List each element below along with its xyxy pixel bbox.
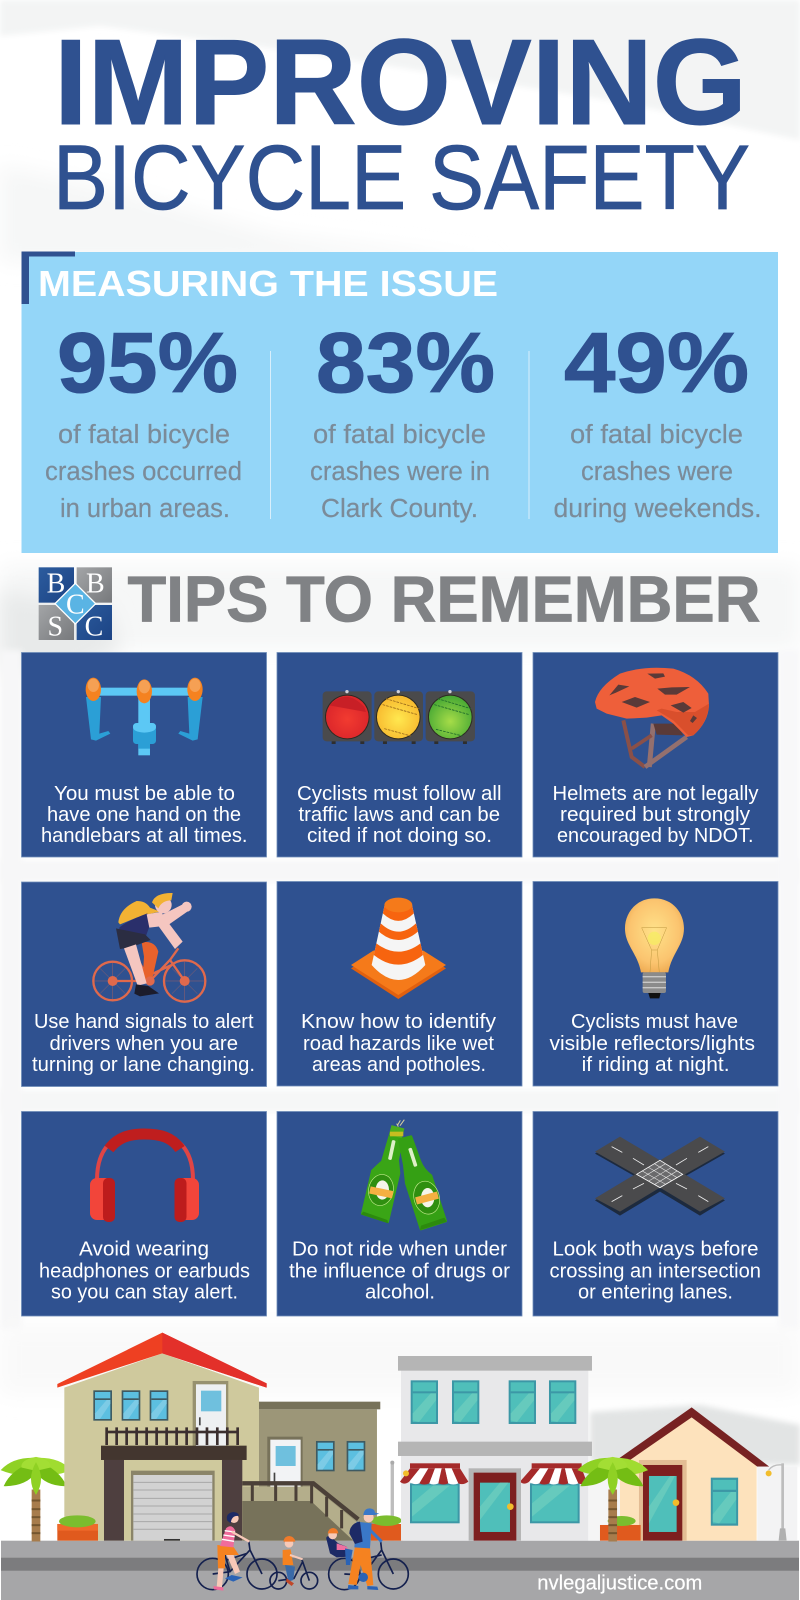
panel heading: MEASURING THE ISSUE — [38, 263, 498, 304]
tip card: intersection: crossing an intersection — [550, 1260, 761, 1282]
tip card: headphones: Avoid wearing — [79, 1238, 209, 1260]
middle lamp post and planter — [371, 1461, 403, 1541]
left house — [57, 1333, 267, 1541]
tip card: road hazards: road hazards like wet — [303, 1032, 494, 1055]
stat: 83% — [310, 316, 495, 523]
logo: BBSC: C — [85, 611, 103, 642]
icon: beer bottles — [361, 1120, 447, 1230]
tip card: traffic lights: traffic laws and can be — [298, 803, 500, 826]
tip card: intersection: Look both ways before — [552, 1238, 758, 1260]
logo: BBSC: C — [66, 589, 85, 620]
icon: headphones — [90, 1132, 199, 1222]
left awning — [400, 1463, 468, 1484]
shop windows — [410, 1483, 580, 1523]
icon: helmet — [595, 668, 709, 767]
icon: road intersection — [595, 1137, 725, 1216]
tip card: lights — [533, 882, 778, 1086]
tip card: headphones — [22, 1112, 266, 1316]
tip card: lights: visible reflectors/lights — [550, 1032, 755, 1055]
panel: measuring the issue — [22, 252, 778, 553]
tip card: road hazards — [277, 882, 522, 1086]
tip card: helmet: required but strongly — [560, 803, 751, 826]
tip card: traffic lights: Cyclists must follow all — [297, 782, 502, 805]
shop door — [469, 1468, 521, 1541]
stat: 95%: in urban areas. — [60, 495, 230, 523]
tip card: helmet: Helmets are not legally — [552, 782, 759, 805]
tip card: traffic lights: cited if not doing so. — [307, 824, 492, 847]
stat: 49%: during weekends. — [554, 495, 762, 523]
tip card: traffic lights — [277, 652, 522, 857]
right awning — [520, 1463, 587, 1484]
stat: 83%: 83% — [316, 316, 495, 411]
family cycling — [197, 1508, 408, 1591]
logo: BBSC: B — [47, 569, 65, 600]
title: IMPROVING — [54, 14, 747, 150]
tip card: hand signals: Use hand signals to alert — [34, 1010, 254, 1033]
corner bracket — [22, 252, 75, 304]
tip card: road hazards: Know how to identify — [301, 1010, 497, 1033]
street scene — [1, 1333, 799, 1600]
stat: 95% — [45, 316, 242, 523]
tip card: hand signals: turning or lane changing. — [32, 1053, 255, 1076]
woman on bicycle — [197, 1512, 277, 1591]
tip card: handlebars: handlebars at all times. — [41, 824, 248, 847]
annex building — [242, 1402, 380, 1541]
tip card: drugs and alcohol: the influence of drugs or — [289, 1260, 510, 1282]
stat: 83%: Clark County. — [321, 495, 478, 523]
logo: BBSC: B — [86, 569, 105, 600]
stat: 49%: 49% — [564, 316, 749, 411]
icon: cyclist signalling — [93, 893, 205, 1002]
tip card: handlebars: You must be able to — [54, 782, 235, 805]
logo: BBSC: S — [48, 611, 63, 642]
stat: 49%: crashes were — [581, 458, 733, 486]
tip card: headphones: so you can stay alert. — [51, 1280, 238, 1304]
tip card: lights: Cyclists must have — [571, 1010, 738, 1033]
tip card: drugs and alcohol: alcohol. — [365, 1280, 435, 1304]
tip card: helmet: encouraged by NDOT. — [557, 824, 754, 847]
right palm tree — [577, 1457, 648, 1541]
man with child seat on bicycle — [326, 1508, 408, 1590]
stat: 83%: of fatal bicycle — [313, 421, 486, 449]
tip card: intersection — [533, 1112, 778, 1316]
title — [53, 14, 750, 229]
left palm tree — [1, 1457, 71, 1541]
stat: 49%: of fatal bicycle — [570, 421, 743, 449]
stat: 95%: of fatal bicycle — [58, 421, 230, 449]
right cottage — [600, 1407, 797, 1541]
icon: handlebars — [86, 678, 203, 755]
website url: nvlegaljustice.com — [537, 1572, 702, 1594]
logo: BBSC — [39, 567, 112, 642]
tip card: hand signals — [22, 882, 266, 1086]
tip card: road hazards: areas and potholes. — [312, 1053, 486, 1076]
tip card: intersection: or entering lanes. — [578, 1280, 733, 1304]
tip card: helmet — [533, 652, 778, 857]
tip card: drugs and alcohol: Do not ride when under — [292, 1238, 507, 1260]
stat: 95%: 95% — [57, 316, 238, 411]
icon: traffic lights — [323, 690, 475, 744]
child on small bicycle — [270, 1536, 318, 1589]
heading: tips to remember: TIPS TO REMEMBER — [128, 562, 760, 636]
icon: light bulb — [625, 898, 684, 998]
storefront building — [398, 1356, 620, 1541]
tip card: hand signals: drivers when you are — [50, 1032, 238, 1055]
tip card: headphones: headphones or earbuds — [39, 1260, 250, 1282]
icon: traffic cone — [351, 898, 446, 999]
tip card: handlebars: have one hand on the — [47, 803, 241, 826]
tip card: handlebars — [22, 652, 266, 857]
tip card: lights: if riding at night. — [582, 1053, 730, 1076]
stat: 83%: crashes were in — [310, 458, 490, 486]
tip card: drugs and alcohol — [277, 1112, 522, 1316]
stat: 49% — [554, 316, 762, 523]
road — [1, 1541, 799, 1600]
stat: 95%: crashes occurred — [45, 458, 242, 486]
